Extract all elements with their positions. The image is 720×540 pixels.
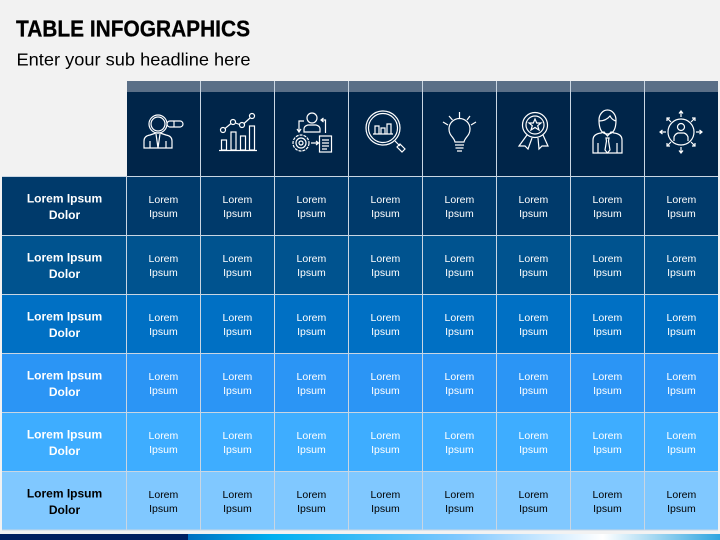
table cell text row 2: Ipsum [371, 267, 400, 279]
table cell text row 1 [149, 194, 697, 220]
table cell text row 4: Ipsum [371, 385, 400, 397]
row labels: Dolor [49, 267, 80, 281]
table cell text row 4: Ipsum [519, 385, 548, 397]
table cell text row 3: Ipsum [519, 326, 548, 338]
table cell text row 6: Ipsum [223, 503, 252, 515]
table cell text row 3: Lorem [519, 312, 549, 324]
table cell text row 5: Lorem [297, 430, 327, 442]
table cell text row 1: Lorem [593, 194, 623, 206]
table cell text row 6: Ipsum [445, 503, 474, 515]
table cell text row 4: Ipsum [445, 385, 474, 397]
table cell text row 5: Ipsum [593, 444, 622, 456]
table cell text row 5: Lorem [667, 430, 697, 442]
table cell text row 2: Lorem [519, 253, 549, 265]
table cell text row 2: Ipsum [297, 267, 326, 279]
table cell text row 3: Lorem [445, 312, 475, 324]
table cell text row 1: Ipsum [593, 208, 622, 220]
icon: person with radiating arrows [660, 111, 702, 153]
icon: growth chart [219, 114, 257, 150]
table cell text row 1: Lorem [223, 194, 253, 206]
table cell text row 6: Lorem [519, 489, 549, 501]
table cell text row 4 [149, 371, 697, 397]
table cell text row 3: Ipsum [297, 326, 326, 338]
table cell text row 5: Ipsum [223, 444, 252, 456]
table rows [2, 177, 718, 530]
row labels: Dolor [49, 208, 80, 222]
table cell text row 1: Ipsum [519, 208, 548, 220]
table cell text row 4: Ipsum [223, 385, 252, 397]
table cell text row 5: Ipsum [445, 444, 474, 456]
table cell text row 1: Ipsum [223, 208, 252, 220]
icon: light bulb [443, 112, 476, 151]
table cell text row 5: Ipsum [519, 444, 548, 456]
table cell text row 5: Lorem [149, 430, 179, 442]
table cell text row 4: Ipsum [149, 385, 178, 397]
subtitle: Enter your sub headline here [16, 50, 250, 70]
table cell text row 6: Lorem [371, 489, 401, 501]
table cell text row 2: Lorem [297, 253, 327, 265]
table cell text row 2: Lorem [593, 253, 623, 265]
row labels: Lorem Ipsum [27, 250, 102, 264]
table cell text row 3: Lorem [223, 312, 253, 324]
table cell text row 3: Ipsum [223, 326, 252, 338]
table cell text row 2: Lorem [667, 253, 697, 265]
table cell text row 5: Lorem [593, 430, 623, 442]
table cell text row 5: Ipsum [149, 444, 178, 456]
table cell text row 3: Ipsum [371, 326, 400, 338]
table cell text row 2: Lorem [371, 253, 401, 265]
table cell text row 6: Ipsum [149, 503, 178, 515]
table cell text row 3: Lorem [149, 312, 179, 324]
table cell text row 5 [149, 430, 697, 456]
table cell text row 2: Lorem [445, 253, 475, 265]
table cell text row 2: Ipsum [223, 267, 252, 279]
table cell text row 1: Lorem [371, 194, 401, 206]
table cell text row 2: Ipsum [519, 267, 548, 279]
table cell text row 2: Ipsum [149, 267, 178, 279]
table cell text row 4: Lorem [593, 371, 623, 383]
icon: magnifier with bar chart [366, 111, 405, 152]
table cell text row 6: Lorem [223, 489, 253, 501]
icon: award ribbon [519, 112, 548, 149]
table cell text row 2: Ipsum [445, 267, 474, 279]
table cell text row 5: Ipsum [667, 444, 696, 456]
table cell text row 3: Ipsum [667, 326, 696, 338]
table cell text row 4: Lorem [149, 371, 179, 383]
table cell text row 6: Ipsum [297, 503, 326, 515]
table cell text row 1: Ipsum [445, 208, 474, 220]
icon: person with magnifier [144, 115, 183, 148]
row labels: Lorem Ipsum [27, 368, 102, 382]
table cell text row 3 [149, 312, 697, 338]
table cell text row 3: Lorem [667, 312, 697, 324]
table cell text row 1: Ipsum [371, 208, 400, 220]
footer colour bar [0, 534, 720, 540]
row labels: Lorem Ipsum [27, 486, 102, 500]
table header band [127, 81, 718, 177]
table cell text row 4: Lorem [667, 371, 697, 383]
table cell text row 4: Ipsum [667, 385, 696, 397]
table cell text row 5: Lorem [445, 430, 475, 442]
table cell text row 6: Lorem [593, 489, 623, 501]
table cell text row 1: Lorem [519, 194, 549, 206]
row labels [27, 191, 102, 517]
table cell text row 2 [149, 253, 697, 279]
table cell text row 2: Ipsum [593, 267, 622, 279]
table cell text row 3: Lorem [371, 312, 401, 324]
table cell text row 2: Lorem [149, 253, 179, 265]
icon: person, gear and document [293, 113, 332, 152]
table cell text row 6 [149, 489, 697, 515]
icon: businessman [593, 110, 622, 153]
table cell text row 4: Ipsum [297, 385, 326, 397]
table cell text row 4: Lorem [519, 371, 549, 383]
table cell text row 5: Ipsum [371, 444, 400, 456]
table cell text row 3: Ipsum [149, 326, 178, 338]
table cell text row 1: Ipsum [297, 208, 326, 220]
table cell text row 4: Lorem [445, 371, 475, 383]
table cell text row 5: Lorem [371, 430, 401, 442]
table cell text row 6: Lorem [297, 489, 327, 501]
table cell text row 4: Ipsum [593, 385, 622, 397]
row labels: Lorem Ipsum [27, 309, 102, 323]
table cell text row 6: Ipsum [667, 503, 696, 515]
table cell text row 6: Ipsum [371, 503, 400, 515]
table cell text row 1: Ipsum [149, 208, 178, 220]
table cell text row 4: Lorem [223, 371, 253, 383]
table cell text row 3: Lorem [593, 312, 623, 324]
table cell text row 6: Lorem [445, 489, 475, 501]
row labels: Lorem Ipsum [27, 427, 102, 441]
table cell text row 3: Ipsum [445, 326, 474, 338]
table cell text row 2: Lorem [223, 253, 253, 265]
table cell text row 1: Ipsum [667, 208, 696, 220]
table cell text row 4: Lorem [297, 371, 327, 383]
title: TABLE INFOGRAPHICS [16, 16, 250, 42]
table cell text row 1: Lorem [297, 194, 327, 206]
table cell text row 5: Ipsum [297, 444, 326, 456]
table cell text row 5: Lorem [223, 430, 253, 442]
table cell text row 6: Lorem [149, 489, 179, 501]
table cell text row 6: Ipsum [593, 503, 622, 515]
table cell text row 6: Lorem [667, 489, 697, 501]
table cell text row 1: Lorem [667, 194, 697, 206]
row labels: Dolor [49, 385, 80, 399]
table cell text row 4: Lorem [371, 371, 401, 383]
row labels: Lorem Ipsum [27, 191, 102, 205]
row labels: Dolor [49, 326, 80, 340]
table cell text row 3: Lorem [297, 312, 327, 324]
table cell text row 5: Lorem [519, 430, 549, 442]
table cell text row 2: Ipsum [667, 267, 696, 279]
table cell text row 1: Lorem [149, 194, 179, 206]
row labels: Dolor [49, 503, 80, 517]
table cell text row 6: Ipsum [519, 503, 548, 515]
table cell text row 1: Lorem [445, 194, 475, 206]
row labels: Dolor [49, 444, 80, 458]
table cell text row 3: Ipsum [593, 326, 622, 338]
